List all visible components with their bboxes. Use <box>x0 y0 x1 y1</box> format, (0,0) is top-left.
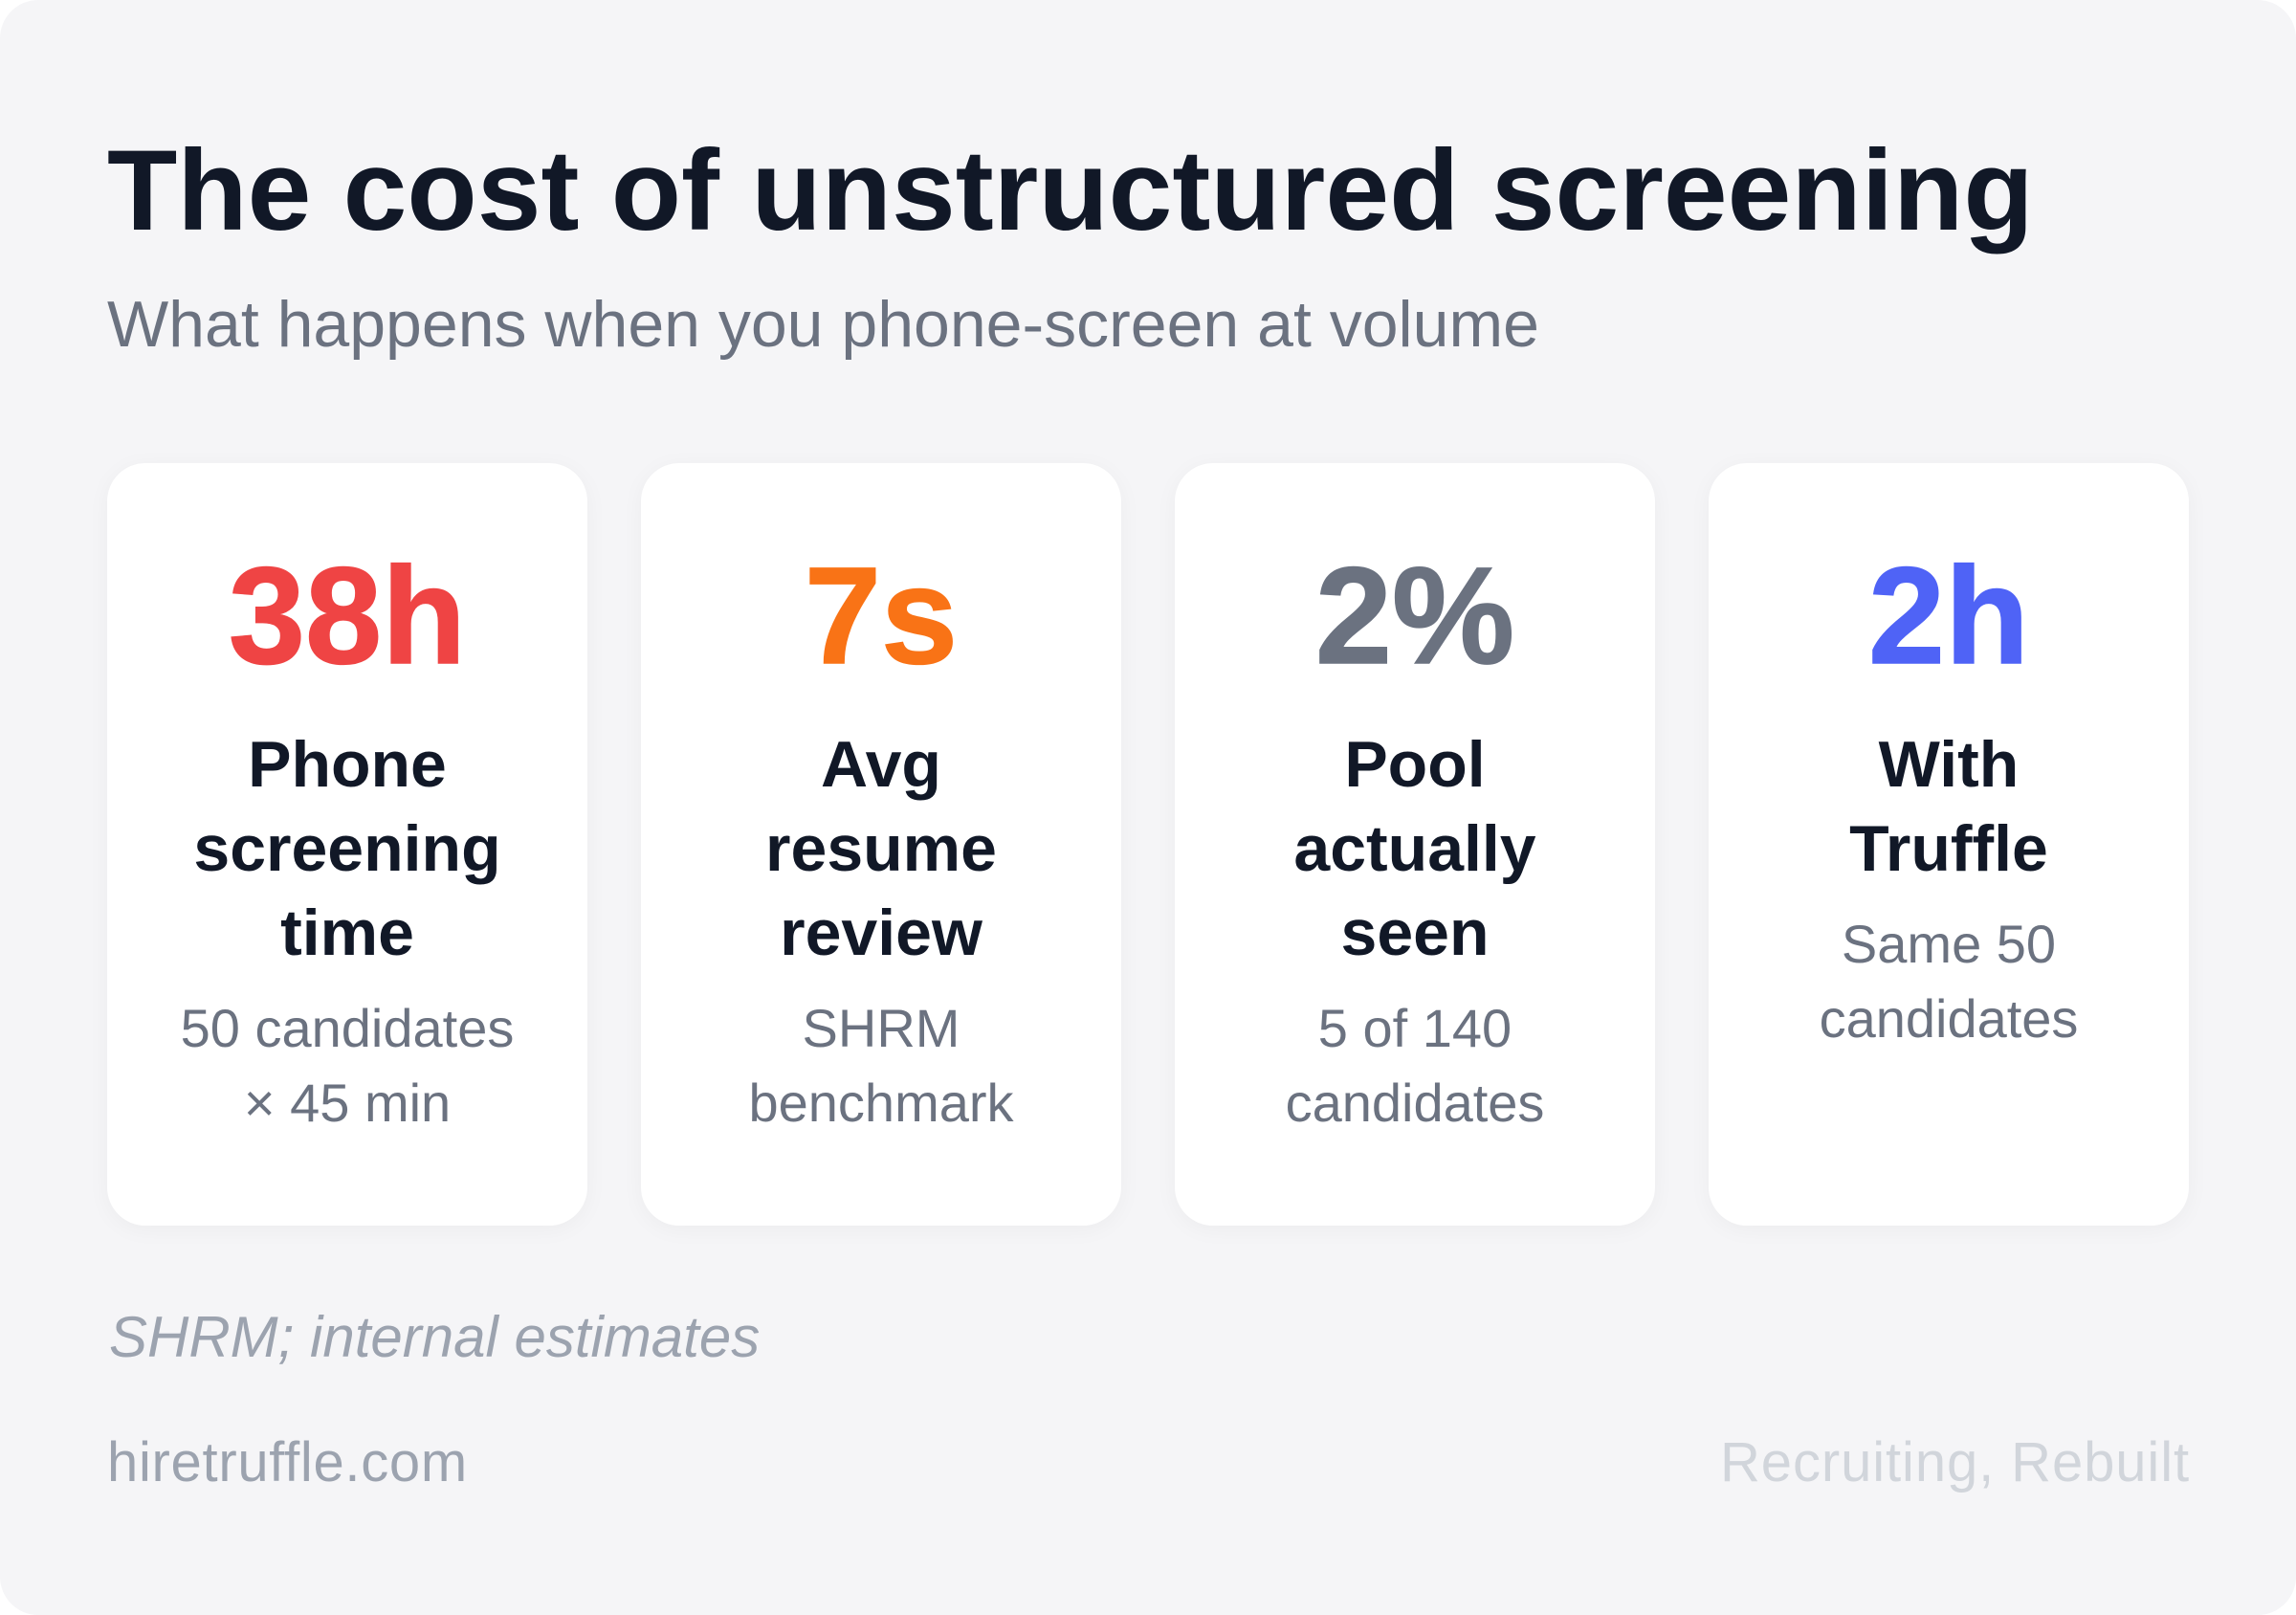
detail: 50 candidates × 45 min: × 45 min <box>244 1073 451 1133</box>
footer: tagline: Recruiting, Rebuilt <box>1720 1431 2190 1493</box>
detail: 5 of 140 candidates: candidates <box>1286 1073 1544 1133</box>
panel: phone screening time <box>107 463 587 1226</box>
detail: 50 candidates × 45 min <box>181 998 514 1133</box>
subtitle: What happens when you phone-screen at volume <box>107 288 1539 361</box>
stat: 38h: 38h <box>229 539 466 693</box>
panel: avg resume review <box>641 463 1121 1226</box>
label: avg resume review <box>765 728 997 969</box>
detail: same 50 candidates: Same 50 <box>1842 914 2056 974</box>
detail: 5 of 140 candidates <box>1286 998 1544 1133</box>
stat: 7s: 7s <box>805 539 958 693</box>
label: pool actually seen: actually <box>1293 812 1536 885</box>
label: with Truffle: Truffle <box>1849 812 2048 885</box>
label: with Truffle <box>1849 728 2048 885</box>
label: avg resume review: Avg <box>821 728 941 801</box>
label: phone screening time: time <box>280 896 414 969</box>
detail: SHRM benchmark <box>748 998 1014 1133</box>
label: pool actually seen: seen <box>1341 896 1489 969</box>
stat: 2h: 2h <box>1868 539 2029 693</box>
detail: SHRM benchmark: benchmark <box>748 1073 1014 1133</box>
label: phone screening time: screening <box>193 812 501 885</box>
label: phone screening time: Phone <box>248 728 447 801</box>
footer: website: hiretruffle.com <box>107 1431 468 1493</box>
panel: with Truffle <box>1709 463 2189 1226</box>
detail: same 50 candidates <box>1820 914 2078 1049</box>
stat: 2%: 2% <box>1315 539 1514 693</box>
title: The cost of unstructured screening <box>107 126 2034 254</box>
label: avg resume review: resume <box>765 812 997 885</box>
label: pool actually seen <box>1293 728 1536 969</box>
detail: 5 of 140 candidates: 5 of 140 <box>1318 998 1512 1058</box>
detail: same 50 candidates: candidates <box>1820 988 2078 1049</box>
source note: SHRM; internal estimates <box>109 1305 760 1369</box>
label: pool actually seen: Pool <box>1344 728 1486 801</box>
panel: pool actually seen <box>1175 463 1655 1226</box>
label: with Truffle: With <box>1879 728 2019 801</box>
detail: SHRM benchmark: SHRM <box>803 998 960 1058</box>
label: avg resume review: review <box>780 896 982 969</box>
label: phone screening time <box>193 728 501 969</box>
detail: 50 candidates × 45 min: 50 candidates <box>181 998 514 1058</box>
